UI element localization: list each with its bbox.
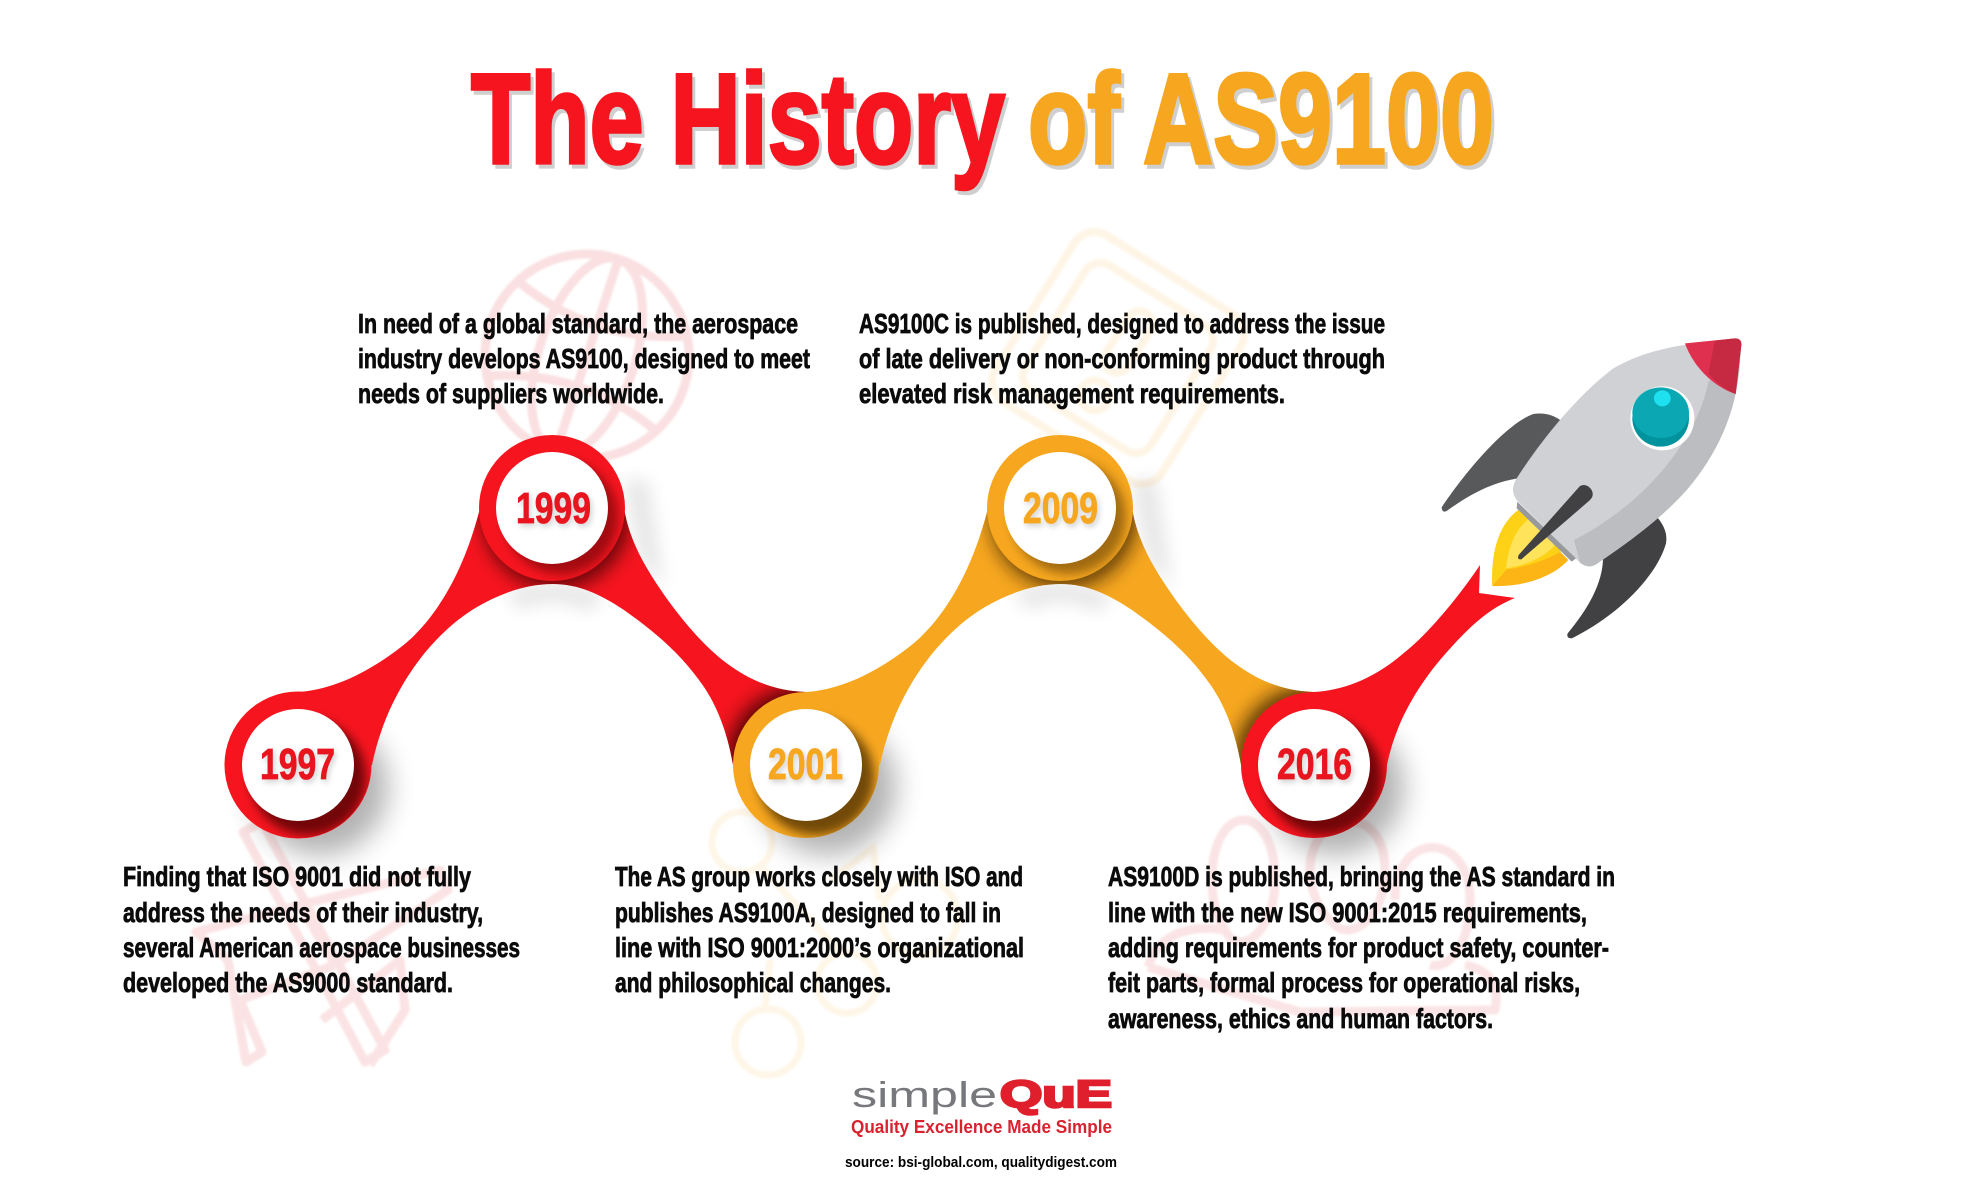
text block: 1997 xyxy=(123,861,520,998)
logo: simpleQuE xyxy=(851,1074,1112,1137)
text block: 1997: developed the AS9000 standard. xyxy=(123,967,453,998)
rocket nose xyxy=(1685,338,1741,394)
text block: 2001: and philosophical changes. xyxy=(615,967,891,998)
rocket centre fin xyxy=(1518,485,1593,559)
timeline ribbon: red tail to rocket xyxy=(1314,565,1515,765)
node: 1999 xyxy=(479,435,625,581)
node: 1997: 1997 xyxy=(260,740,335,789)
text block: 2001: line with ISO 9001:2000’s organizational xyxy=(615,932,1024,963)
logo: simpleQuE: Quality Excellence Made Simple xyxy=(851,1117,1112,1137)
text block: 1999: needs of suppliers worldwide. xyxy=(358,378,664,409)
text block: 2009: AS9100C is published, designed to address the issue xyxy=(859,308,1385,339)
rocket body shade xyxy=(1574,360,1740,566)
watermark icon: globe xyxy=(471,231,703,481)
watermark icon: people xyxy=(1148,820,1496,1012)
text block: 2016: awareness, ethics and human factors. xyxy=(1108,1003,1493,1034)
soft shadows under arches xyxy=(505,480,1172,612)
text block: 2016 xyxy=(1108,861,1615,1034)
text block: 2009: elevated risk management requirements. xyxy=(859,378,1285,409)
node: 2016: 2016 xyxy=(1277,740,1352,789)
logo: simpleQuE: simple xyxy=(852,1074,997,1115)
text block: 1997: Finding that ISO 9001 did not fully xyxy=(123,861,471,892)
node: 1997 xyxy=(224,692,372,838)
text block: 1997: several American aerospace businesses xyxy=(123,932,520,963)
text block: 2016: adding requirements for product safety, counter- xyxy=(1108,932,1609,963)
text block: 2016: line with the new ISO 9001:2015 requirements, xyxy=(1108,897,1587,928)
rocket left fin xyxy=(1442,414,1562,512)
title xyxy=(471,48,1494,191)
watermark icon: aircraft xyxy=(196,822,448,1065)
watermark icon: molecule xyxy=(712,812,958,1075)
title: of AS9100 xyxy=(1028,48,1494,191)
icon: rocket xyxy=(1442,338,1741,638)
text block: 2001: The AS group works closely with ISO and xyxy=(615,861,1023,892)
text block: 1999: In need of a global standard, the aerospace xyxy=(358,308,798,339)
logo: simpleQuE: QuE xyxy=(1000,1074,1112,1116)
text block: 2016: feit parts, formal process for operational risks, xyxy=(1108,967,1580,998)
rocket base strip xyxy=(1517,502,1576,562)
rocket window xyxy=(1630,386,1694,450)
rocket flame xyxy=(1492,510,1568,586)
text block: 2016: AS9100D is published, bringing the AS standard in xyxy=(1108,861,1615,892)
soft ground shadows of timeline xyxy=(252,719,1404,855)
watermark icon: warning document xyxy=(983,223,1253,493)
rocket right fin xyxy=(1567,517,1666,638)
node: 2001 xyxy=(733,692,879,838)
title: The History xyxy=(471,48,1005,191)
text block: 2009: of late delivery or non-conforming product through xyxy=(859,343,1385,374)
node: 2009 xyxy=(987,435,1133,581)
text block: 2001: publishes AS9100A, designed to fall in xyxy=(615,897,1001,928)
text block: 1997: address the needs of their industry, xyxy=(123,897,483,928)
text block: 2001 xyxy=(615,861,1024,998)
node: 2001: 2001 xyxy=(768,740,843,789)
text block: 1999 xyxy=(358,308,810,409)
timeline ribbon: orange 2001 to 2016 xyxy=(806,510,1314,765)
text block: 2009 xyxy=(859,308,1385,409)
source line: source: bsi-global.com, qualitydigest.com xyxy=(845,1154,1117,1171)
node: 2016 xyxy=(1241,692,1387,838)
rocket nose shade xyxy=(1708,338,1741,394)
timeline ribbon: red 1997 to 2001 xyxy=(300,510,806,765)
node: 2009: 2009 xyxy=(1023,484,1098,533)
rocket body xyxy=(1513,338,1741,566)
node: 1999: 1999 xyxy=(516,484,591,533)
text block: 1999: industry develops AS9100, designed to meet xyxy=(358,343,810,374)
